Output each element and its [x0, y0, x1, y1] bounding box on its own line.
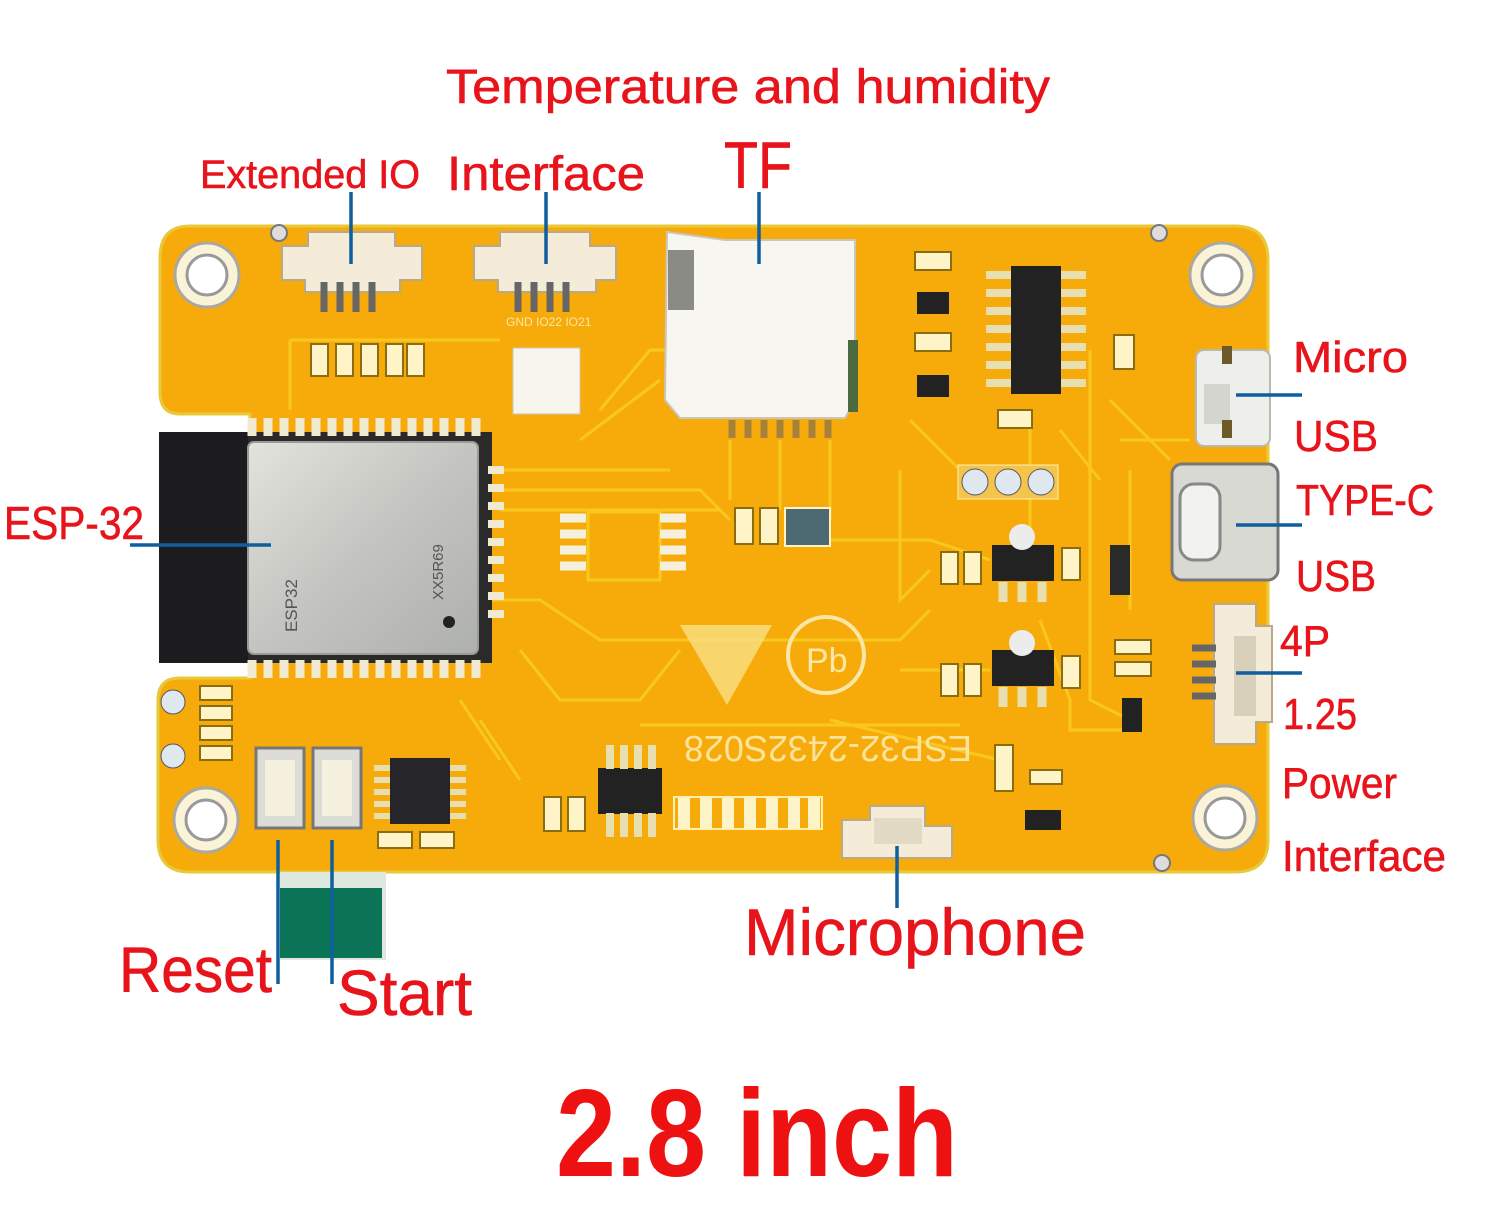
label: 1.25: 1.25 [1283, 690, 1357, 739]
transistors [915, 252, 1134, 428]
switches S3 S1 S5 [958, 465, 1058, 499]
ESP-32 antenna [159, 432, 251, 663]
leader: type-C [1236, 523, 1302, 527]
chip U3 [374, 758, 466, 848]
label: type-C: TYPE-C [1296, 476, 1434, 525]
label: interface right: Interface [1282, 832, 1446, 881]
resistor row [311, 344, 424, 376]
label: extended IO: Extended IO [200, 153, 420, 197]
circuit traces [290, 340, 1190, 780]
ESP-32 module: XX5R69 [430, 544, 447, 600]
title: 2.8 inch: 2.8 inch [556, 1065, 958, 1203]
speaker connector [842, 806, 952, 858]
green display flex cable [280, 872, 386, 960]
label: interface: Interface [447, 148, 645, 201]
label: micro USB line 2: USB [1294, 412, 1378, 461]
panel: circuit board [158, 225, 1278, 872]
lower-left components [161, 686, 232, 768]
temperature and humidity connector: GND IO22 IO21 [506, 315, 592, 329]
ESP-32 module [248, 418, 504, 678]
certification logos: Pb [806, 642, 848, 680]
transistor Q2 [995, 745, 1062, 830]
leader: TF [757, 192, 761, 264]
leader: reset [276, 840, 280, 984]
micro USB port [1196, 346, 1270, 446]
leader: ESP-32 [130, 543, 271, 547]
chip U5 and passives [544, 745, 822, 837]
label: TF: TF [724, 128, 792, 202]
leader: micro USB [1236, 393, 1302, 397]
regulators [941, 524, 1151, 732]
4P power connector [1192, 604, 1272, 744]
leader: 4P power [1236, 671, 1302, 675]
label: microphone: Microphone [744, 895, 1086, 969]
leader: extended IO [349, 192, 353, 264]
LED [513, 348, 580, 414]
chip U6 [986, 266, 1086, 394]
extended IO connector [282, 232, 422, 312]
heading: temperature and humidity: Temperature and humidity [446, 61, 1050, 114]
label: power: Power [1282, 759, 1397, 808]
leader: start [330, 840, 334, 984]
ESP-32 module: ESP32 [282, 579, 301, 632]
reset and boot buttons [256, 748, 361, 828]
certification logos [680, 617, 864, 705]
middle components [560, 508, 830, 566]
leader: interface [544, 192, 548, 264]
leader: microphone [895, 846, 899, 908]
label: 4P: 4P [1280, 617, 1330, 666]
label: start: Start [337, 957, 472, 1029]
label: type-C USB line 2: USB [1296, 552, 1376, 601]
label: micro: Micro [1293, 333, 1408, 382]
temperature and humidity connector [474, 232, 616, 329]
type-C port [1172, 464, 1278, 580]
label: ESP-32: ESP-32 [4, 497, 144, 549]
board name silkscreen: ESP32-2432S028 [684, 728, 972, 769]
label: reset: Reset [119, 934, 272, 1006]
mounting holes [174, 225, 1257, 871]
TF card slot [665, 232, 858, 438]
